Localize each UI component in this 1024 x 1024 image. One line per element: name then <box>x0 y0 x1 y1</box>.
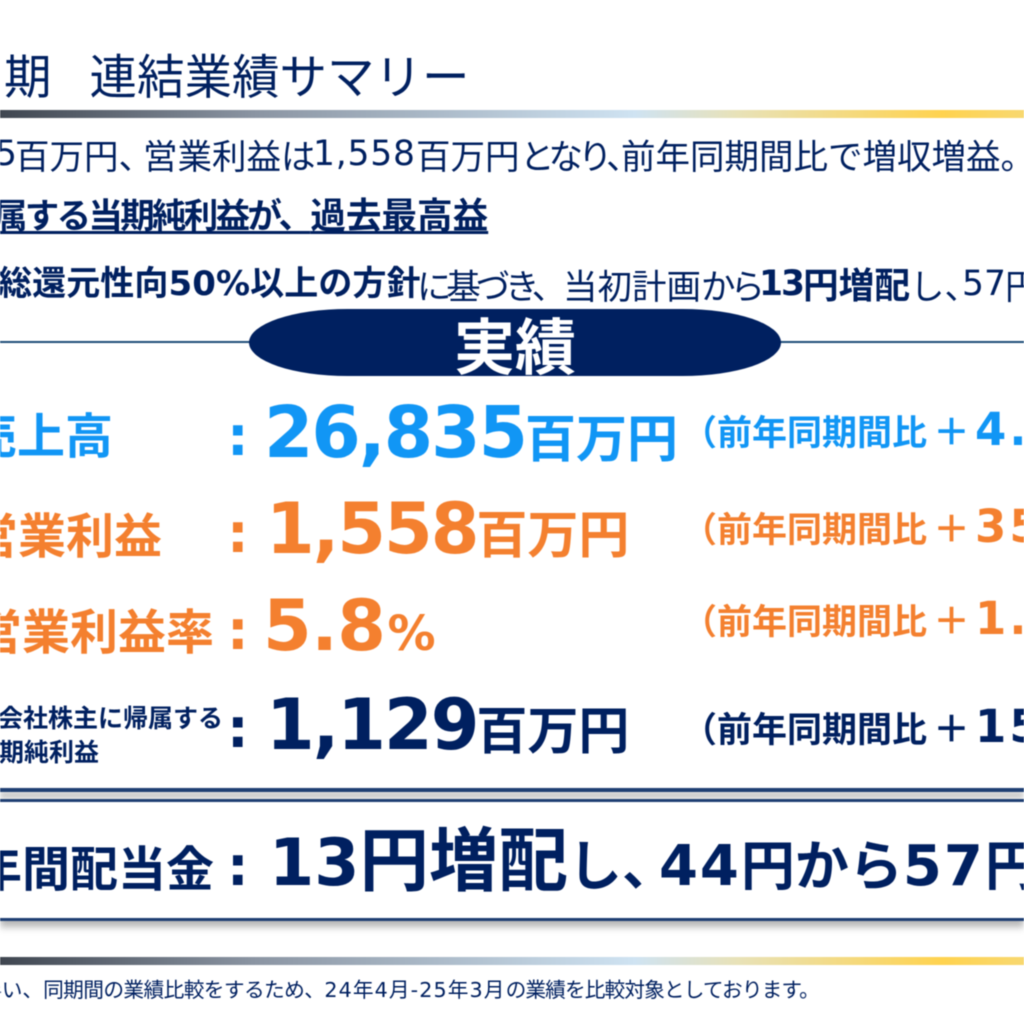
dividend colon: : <box>227 835 249 898</box>
operating profit colon: : <box>227 502 249 565</box>
net profit label: 期純利益 <box>0 733 99 769</box>
dividend panel <box>0 787 1024 932</box>
row: net profit <box>0 684 1024 769</box>
sales comparison: （前年同期間比＋4. <box>682 402 1024 456</box>
row: sales <box>0 391 1024 474</box>
panel box <box>0 799 1024 921</box>
net profit colon: : <box>227 697 249 760</box>
header gradient rule <box>0 110 1024 118</box>
title: 期 連結業績サマリー <box>4 39 470 108</box>
summary line: sales and operating profit: 営業利益は <box>143 129 316 179</box>
summary line: sales and operating profit: 前年同期間比で増収増益。 <box>621 129 1024 179</box>
summary line: shareholder return <box>0 258 1024 309</box>
footnote: 伴い、同期間の業績比較をするため、24年4月-25年3月の業績を比較対象としております。 <box>0 973 819 1003</box>
summary line: shareholder return: 総還元性向50%以上の方針 <box>0 264 421 304</box>
results divider line <box>0 341 1024 343</box>
results pill <box>249 309 781 376</box>
summary line: sales and operating profit <box>0 129 1024 179</box>
summary line: sales and operating profit: 百万円、 <box>15 129 153 179</box>
net profit value: 1,129百万円 <box>266 684 629 766</box>
dividend value: 13円増配し、44円から57円 <box>269 805 1024 906</box>
net profit label <box>0 699 223 769</box>
row: operating margin <box>0 585 1024 667</box>
summary line: sales and operating profit: となり、 <box>520 129 636 179</box>
panel top rule with shadow <box>0 788 1024 792</box>
summary line: shareholder return: に基づき、 <box>417 259 561 309</box>
pill label: 実績 <box>454 298 576 387</box>
net profit label: 会社株主に帰属する <box>0 699 223 735</box>
sales colon: : <box>227 405 249 468</box>
operating margin colon: : <box>227 599 249 662</box>
sales value: 26,835百万円 <box>264 391 678 474</box>
row: operating profit <box>0 488 1024 570</box>
summary line: shareholder return: から <box>701 259 760 309</box>
summary line: shareholder return: 円増配 <box>803 258 910 309</box>
summary line: sales and operating profit: 1,558 <box>313 134 416 174</box>
footer gradient rule <box>0 957 1024 965</box>
summary line: shareholder return: 57 <box>962 264 1006 304</box>
summary line: shareholder return: し、 <box>910 259 979 309</box>
summary line: record profit: 属する当期純利益が、過去最高益 <box>0 188 488 239</box>
operating margin value: 5.8% <box>263 585 436 667</box>
operating margin comparison: （前年同期間比＋1. <box>682 591 1024 645</box>
summary line: shareholder return: 13 <box>759 264 803 304</box>
summary line: shareholder return: 当初計画 <box>563 259 701 309</box>
summary line: sales and operating profit: 百万円 <box>416 129 520 179</box>
operating profit value: 1,558百万円 <box>266 488 629 570</box>
